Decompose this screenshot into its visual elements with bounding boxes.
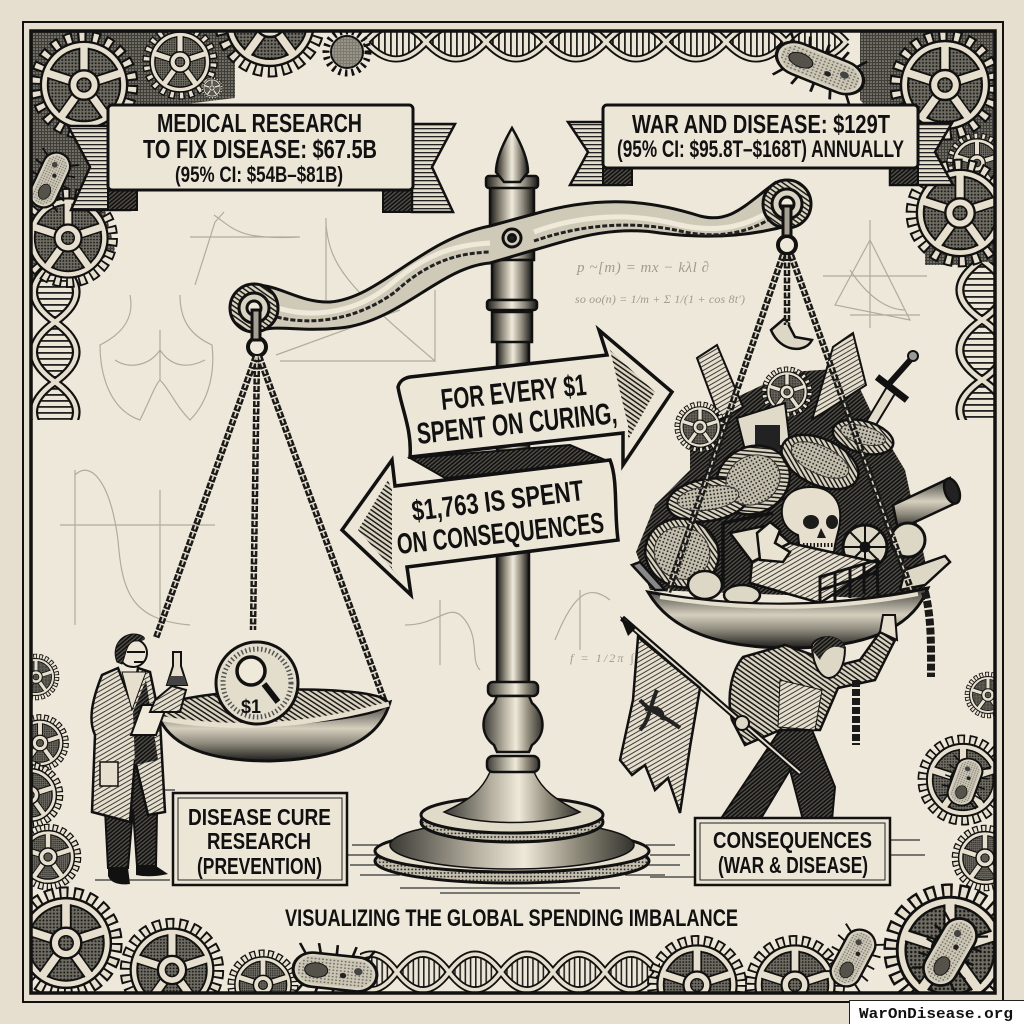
jacket and arms (730, 632, 895, 745)
hands on staff (735, 716, 749, 730)
gears: top left (216, 32, 324, 78)
left pan with $1 coin (155, 642, 390, 761)
sketch: right graphs (405, 590, 610, 670)
label: disease cure research (173, 793, 347, 885)
faint mathematical sketches (60, 212, 927, 670)
gears: bottom left (16, 893, 116, 993)
sword (860, 351, 918, 438)
sketch: upper left graph (190, 212, 435, 361)
pocket (100, 762, 118, 786)
tattered flag and staff (620, 616, 800, 813)
sketch: faint equations: so oo(n) = 1/m + Σ 1/(1 + cos 8t′) (575, 292, 745, 306)
scientist figure (91, 634, 187, 884)
banner: medical research (68, 105, 455, 212)
arrow sign: pointing left (342, 460, 618, 595)
cannon (893, 476, 963, 530)
caption: VISUALIZING THE GLOBAL SPENDING IMBALANCE (285, 905, 738, 932)
gear: left (677, 404, 723, 450)
sketch: lower left curves (60, 470, 215, 625)
scale base (375, 772, 649, 883)
skull (782, 487, 840, 552)
ribbon tails (568, 122, 953, 185)
banner: war and disease (568, 105, 953, 185)
sketch: faint equations: f = 1/2π ∫ dn (570, 651, 655, 665)
flask (167, 652, 187, 685)
head (812, 637, 845, 678)
gear: centre (764, 369, 810, 415)
DNA: left (32, 268, 81, 420)
shoes (108, 866, 168, 884)
legs (105, 760, 158, 868)
left chains (156, 356, 384, 700)
ribbon body (603, 105, 918, 168)
sketch: faint equations (570, 260, 745, 665)
legs (720, 730, 835, 820)
coin with magnifying glass (216, 642, 298, 724)
gears: top right (896, 36, 994, 134)
gears: left edge (24, 194, 112, 282)
arrow text: SPENT ON CURING, (415, 397, 619, 451)
label: consequences: (WAR & DISEASE) (718, 852, 868, 878)
arrow text: $1,763 IS SPENT (410, 475, 586, 528)
arrow text: ON CONSEQUENCES (395, 507, 606, 561)
right pivot ring (763, 180, 811, 254)
debris (632, 556, 950, 605)
arrow sign: upward right (398, 330, 672, 465)
banner text: WAR AND DISEASE: $129T (632, 109, 890, 139)
left pivot ring (230, 284, 278, 356)
right pan (648, 588, 931, 677)
label: disease cure research: RESEARCH (207, 828, 311, 854)
right chains (668, 255, 912, 592)
clipboard (131, 705, 167, 735)
ground shading (95, 790, 925, 893)
DNA: bottom (360, 950, 660, 992)
sketch: upper right triangle (823, 220, 927, 328)
arrow text (395, 475, 606, 561)
head (119, 639, 147, 667)
balance scale (95, 128, 925, 893)
flask arm (150, 686, 186, 712)
sketch: anatomy torso (100, 295, 213, 420)
tower: left (697, 345, 743, 420)
label: consequences: CONSEQUENCES (713, 827, 872, 853)
DNA: right (955, 262, 994, 420)
label: consequences (695, 818, 890, 885)
site watermark: WarOnDisease.org (859, 1006, 1013, 1023)
arrow text (415, 369, 619, 451)
arrow text: FOR EVERY $1 (439, 369, 588, 417)
hanging chain (852, 680, 860, 745)
banner text: MEDICAL RESEARCH (157, 108, 362, 138)
banner: medical research: TO FIX DISEASE: $67.5B (143, 134, 377, 164)
site watermark (849, 1000, 1024, 1024)
broken clock (771, 318, 812, 349)
figure carrying the pan (620, 615, 897, 820)
tower: right (812, 333, 866, 420)
scale column (484, 128, 542, 772)
sketch: faint equations: p ~[m) = mx − kλl ∂ (576, 260, 709, 276)
raised hand (880, 615, 897, 640)
label: disease cure research: DISEASE CURE (188, 804, 331, 830)
DNA: top (362, 32, 850, 62)
coin with magnifying glass: $1 (241, 697, 261, 718)
hospital bed (723, 513, 880, 606)
ribbon tails (68, 124, 455, 212)
gears: right edge and bottom right (964, 672, 994, 718)
scale beam (255, 183, 790, 330)
lab coat (91, 668, 165, 822)
arrow fold between signs (410, 445, 610, 478)
ribbon body (108, 105, 413, 190)
patient (757, 522, 790, 562)
cart wheels (843, 523, 925, 569)
pile of consequences (632, 318, 963, 606)
coins (636, 414, 897, 598)
temple ruin (737, 403, 790, 450)
banner: war and disease: (95% CI: $95.8T–$168T) ANNUALLY (617, 136, 904, 163)
banner: medical research: (95% CI: $54B–$81B) (175, 162, 343, 187)
dark stippled corners (31, 31, 995, 290)
pile mass (636, 368, 925, 600)
label: disease cure research: (PREVENTION) (197, 853, 322, 879)
